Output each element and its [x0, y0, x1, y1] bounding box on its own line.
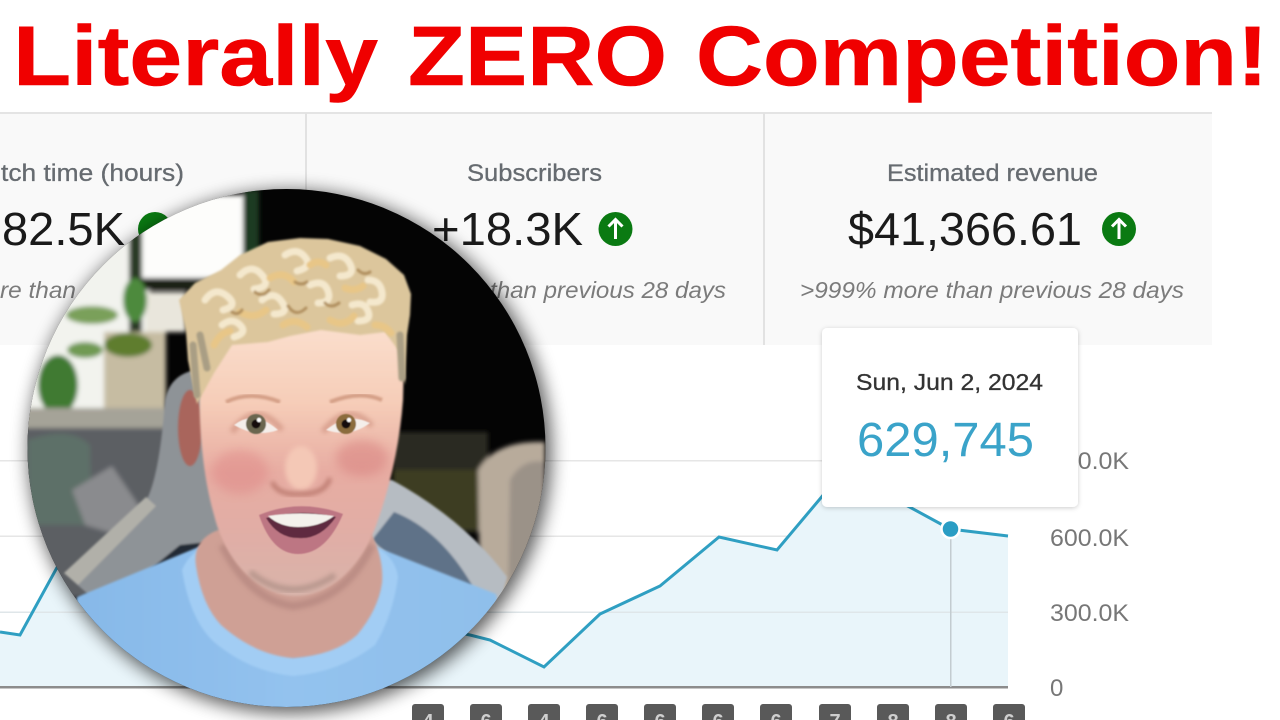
shirt collar: [182, 539, 398, 676]
neck: [195, 530, 382, 658]
y axis labels: 300.0K: [1050, 600, 1129, 627]
stubble: [250, 572, 335, 589]
stat: subscribers: than previous 28 days: [490, 277, 727, 303]
hair curls: [193, 251, 402, 395]
photo background: [20, 180, 545, 600]
data point: [942, 520, 960, 538]
stat: watch time: re than: [0, 277, 76, 303]
title: Competition!: [696, 9, 1268, 103]
face: [200, 320, 405, 596]
stat: estimated revenue: [800, 160, 1185, 303]
stat: watch time: 82.5K: [2, 203, 125, 255]
panel: stats row: [0, 112, 1212, 345]
shirt: [76, 546, 498, 707]
stat: watch time: [0, 160, 184, 303]
eye sockets: [232, 414, 372, 432]
gaming chair: [64, 370, 507, 640]
neck shadow: [222, 545, 372, 606]
cheek blush: [212, 450, 268, 494]
stat: watch time: tch time (hours): [1, 160, 184, 187]
tooltip: [822, 328, 1078, 507]
nose: [285, 446, 317, 490]
portrait: circular photo of surprised man: [20, 180, 551, 720]
chart: line area: [0, 460, 1008, 688]
y axis labels: 0: [1050, 675, 1063, 702]
y axis labels: 600.0K: [1050, 525, 1129, 552]
stat: estimated revenue: Estimated revenue: [887, 160, 1098, 187]
stat: estimated revenue: >999% more than previous 28 days: [800, 277, 1185, 303]
stat: subscribers: +18.3K: [432, 203, 583, 255]
title: Literally: [13, 9, 378, 103]
icon: up arrow: [598, 212, 632, 246]
hair: [179, 238, 411, 404]
y axis labels: [1050, 448, 1129, 702]
tooltip: Sun, Jun 2, 2024: [856, 369, 1043, 395]
eyebrows: [226, 395, 382, 402]
stat: subscribers: Subscribers: [467, 160, 602, 187]
ear: [178, 390, 202, 466]
title: ZERO: [408, 9, 667, 103]
icon: up arrow: [1102, 212, 1136, 246]
mouth: [259, 506, 343, 554]
stat: subscribers: [432, 160, 727, 303]
tooltip: 629,745: [857, 414, 1034, 467]
stat: estimated revenue: $41,366.61: [848, 203, 1082, 255]
y axis labels: 900.0K: [1050, 448, 1129, 475]
title: [13, 9, 1268, 103]
eyes: [234, 414, 370, 434]
x axis video badges: [412, 704, 1025, 720]
